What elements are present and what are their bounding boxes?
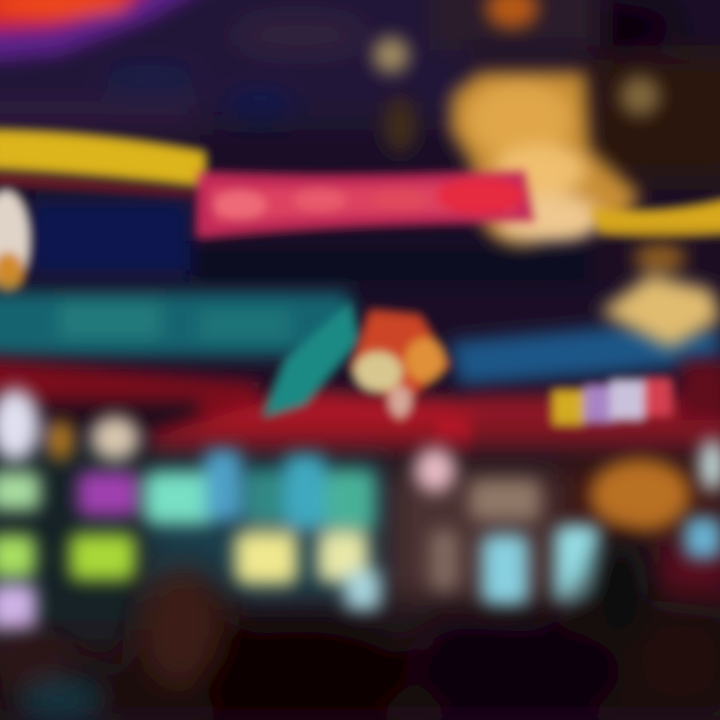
central star: [350, 310, 470, 455]
orange ceiling light: [486, 0, 538, 28]
blue band: [450, 325, 720, 385]
ceiling: [0, 0, 720, 180]
crowd silhouettes: [0, 538, 720, 720]
teal band: [0, 292, 350, 356]
yellow band left: [0, 130, 205, 197]
red and purple top-left band: [0, 0, 220, 62]
ceiling spot lights: [373, 37, 660, 153]
lower chandelier: [600, 244, 720, 348]
slot machine screens: [0, 389, 720, 631]
teal triangle: [262, 302, 358, 418]
yellow band right: [590, 196, 720, 238]
lower scene: [0, 440, 720, 720]
dark blue under-sign zone: [30, 200, 720, 287]
golden chandelier: [450, 72, 640, 268]
white lamp at left edge: [0, 190, 30, 292]
pink sign: [197, 170, 535, 238]
orange glow right: [590, 459, 690, 531]
multicolour strip: [552, 378, 672, 426]
red band: [0, 358, 720, 462]
